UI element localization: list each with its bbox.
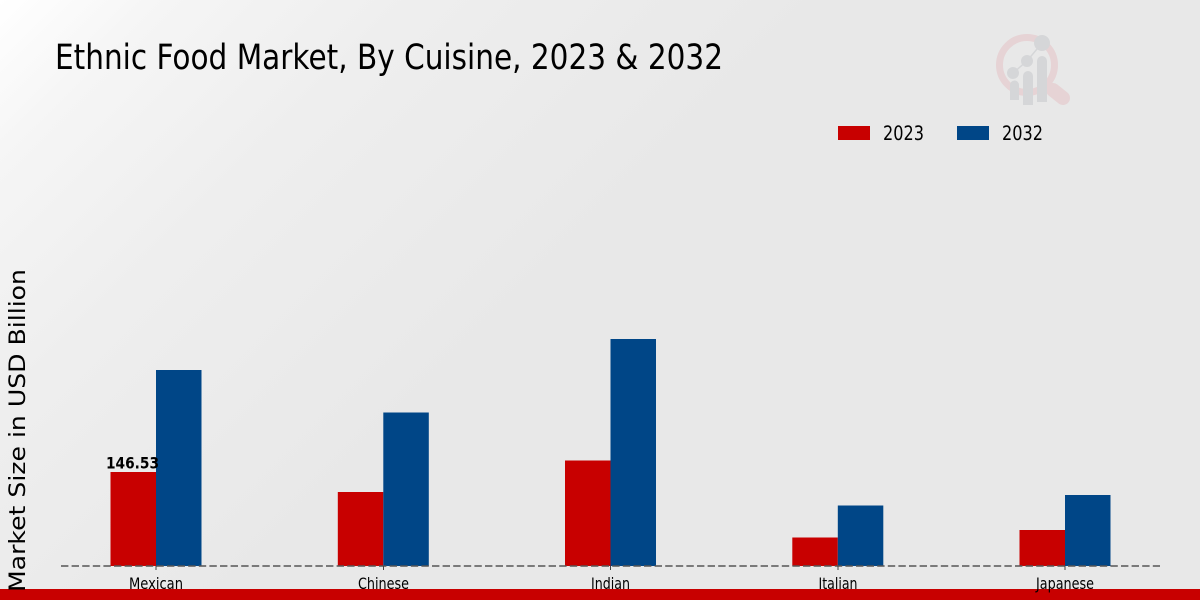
group: Indian: Indian	[591, 574, 630, 593]
title: Ethnic Food Market, By Cuisine, 2023 & 2032	[55, 38, 723, 78]
group: Japanese	[1020, 495, 1110, 593]
group: Chinese	[338, 412, 429, 593]
icon: watermark logo	[1000, 35, 1063, 105]
group: Mexican: 146.53	[106, 454, 159, 472]
y-axis label: Market Size in USD Billion	[6, 269, 31, 592]
x-axis baseline	[61, 566, 1160, 570]
legend	[838, 122, 1043, 145]
group: Indian	[565, 339, 656, 593]
legend: 2023	[838, 122, 924, 145]
legend: 2032: 2032	[1002, 122, 1043, 145]
group: Chinese: Chinese	[358, 574, 409, 593]
group: Mexican	[106, 370, 202, 593]
group: Japanese: Japanese	[1035, 574, 1094, 593]
legend: 2032	[957, 122, 1043, 145]
group: Italian: Italian	[818, 574, 858, 593]
group: Mexican: Mexican	[129, 574, 183, 593]
group: Italian	[792, 506, 883, 593]
bar chart	[61, 339, 1160, 593]
legend: 2023: 2023	[883, 122, 924, 145]
footer bar	[0, 589, 1200, 600]
